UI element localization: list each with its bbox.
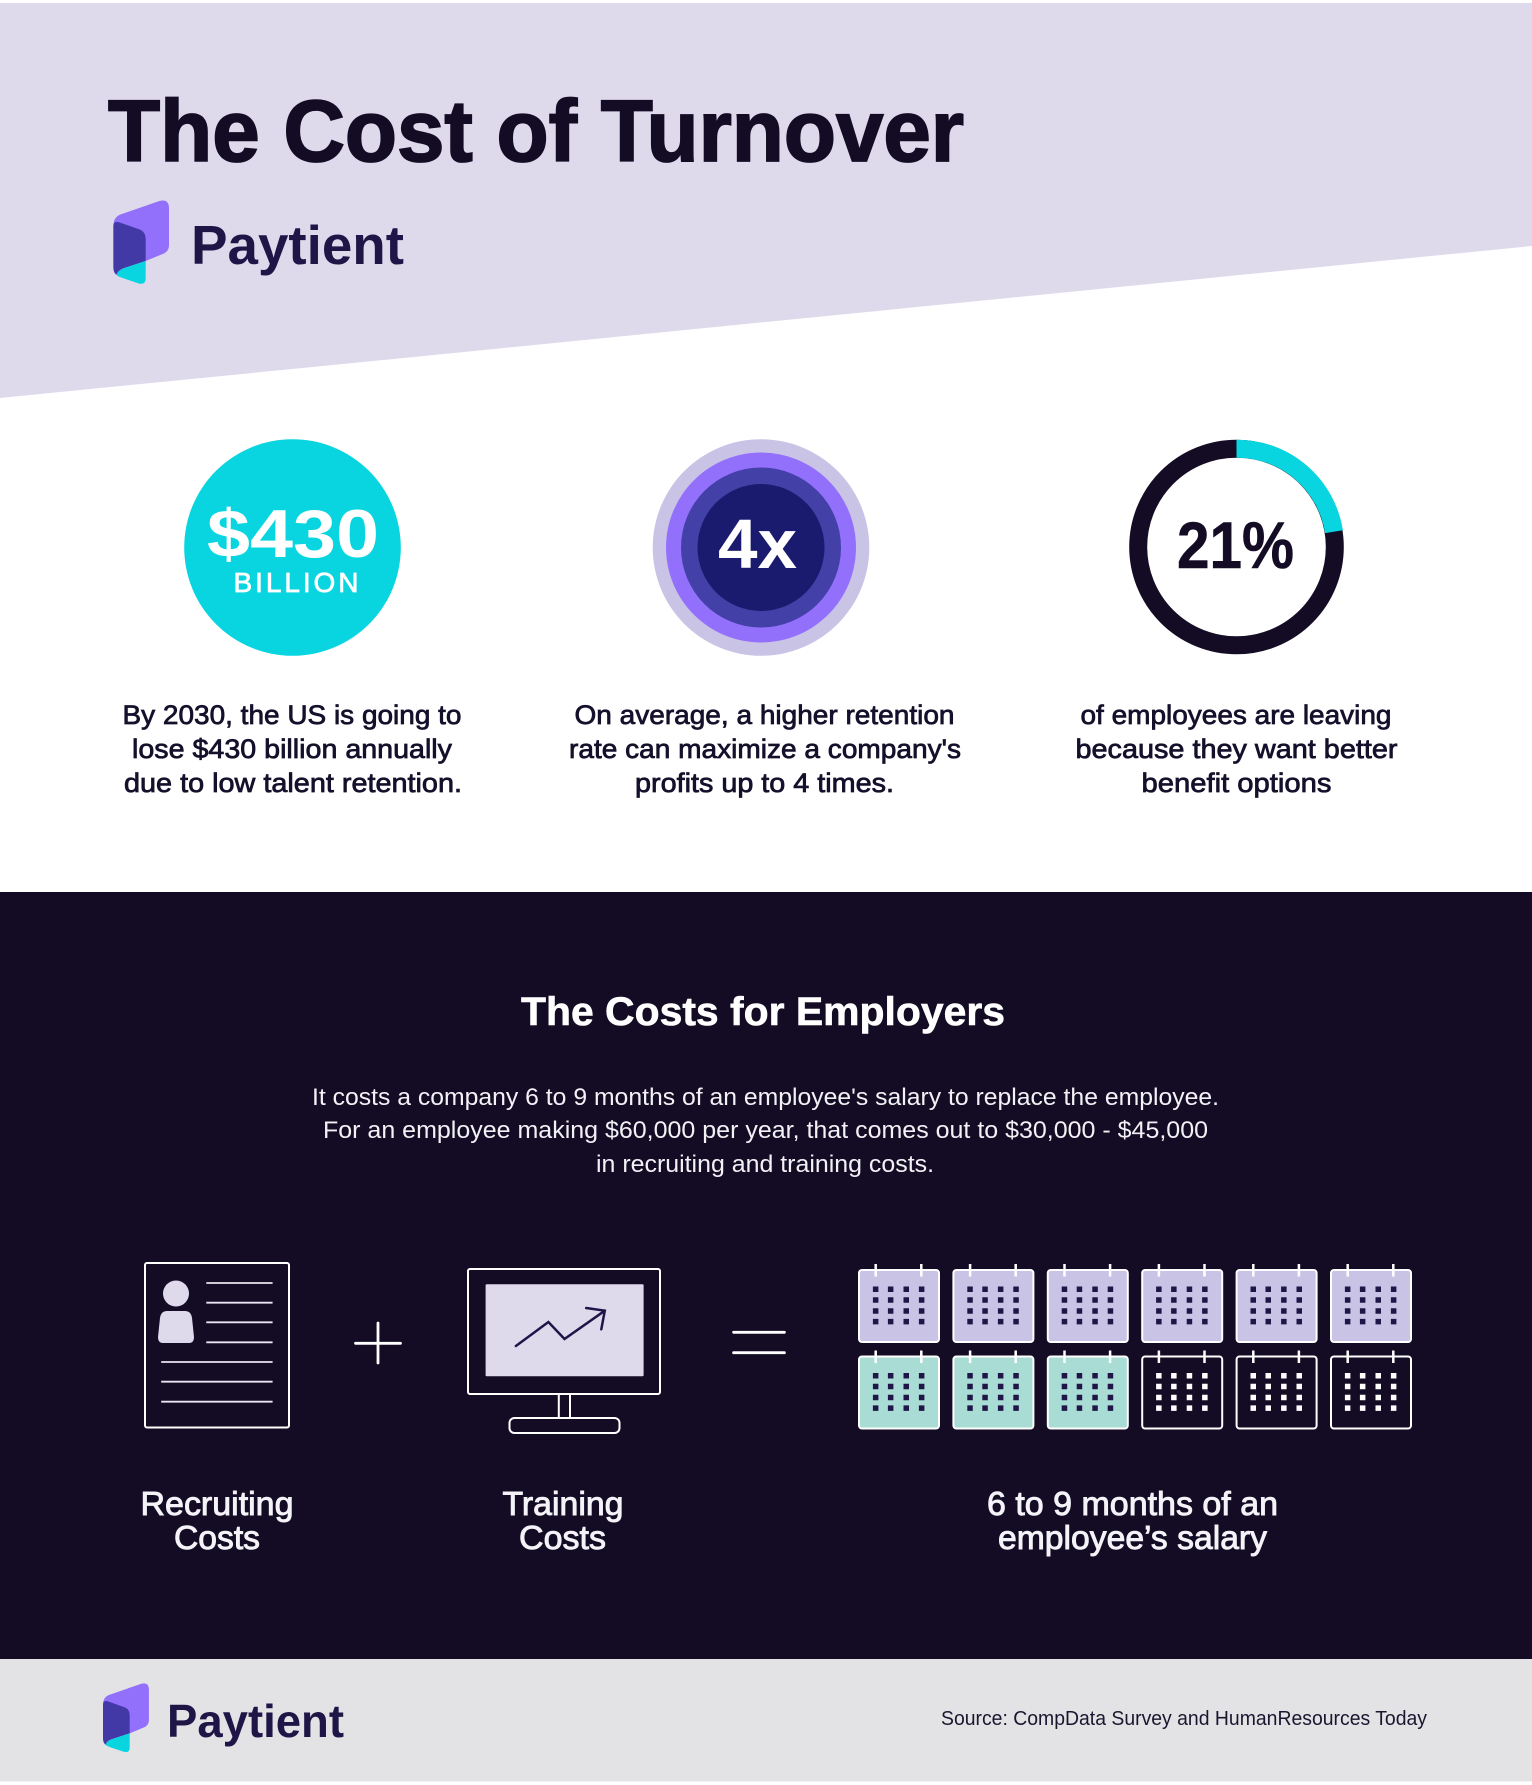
stat description: of employees are leaving: [1080, 700, 1392, 730]
stat description: benefit options: [1142, 768, 1332, 798]
header logo: Paytient: [113, 200, 404, 284]
logo wordmark: Paytient: [167, 1695, 344, 1747]
donut chart: [1138, 449, 1335, 645]
label: recruiting costs: Recruiting: [140, 1485, 294, 1522]
label: recruiting costs: [140, 1485, 294, 1556]
stat description: On average, a higher retention: [574, 700, 954, 730]
calendars: six lavender months: [859, 1264, 1411, 1342]
icon: resume document: [145, 1263, 289, 1428]
dark panel: costs for employers: [0, 892, 1532, 1659]
stat description: By 2030, the US is going to: [122, 700, 462, 730]
stat description: profits up to 4 times.: [635, 768, 894, 798]
stat unit: BILLION: [234, 567, 358, 598]
stat description: [569, 700, 961, 798]
label: recruiting costs: Costs: [174, 1519, 260, 1556]
stat panel: 21%: [1076, 449, 1398, 798]
label: training costs: Training: [502, 1485, 624, 1522]
source note: Source: CompData Survey and HumanResources Today: [941, 1707, 1428, 1730]
label: training costs: Costs: [519, 1519, 606, 1556]
label: months of salary: 6 to 9 months of an: [987, 1485, 1278, 1522]
section body text: It costs a company 6 to 9 months of an employee's salary to replace the employee.: [312, 1084, 1219, 1111]
concentric circles: [653, 439, 869, 656]
stat value: $430: [207, 496, 379, 572]
stat value: 4x: [718, 505, 797, 583]
stat description: rate can maximize a company's: [569, 734, 961, 764]
stat panel: $430 billion: [122, 439, 462, 798]
stat description: lose $430 billion annually: [132, 734, 453, 764]
section heading: The Costs for Employers: [521, 990, 1005, 1034]
icon: Paytient mark: [103, 1683, 149, 1752]
header panel: [0, 3, 1532, 398]
icon: plus sign: [356, 1323, 400, 1363]
icon: Paytient mark: [113, 200, 169, 284]
stat description: because they want better: [1076, 734, 1398, 764]
footer logo: Paytient: [103, 1683, 344, 1752]
label: months of salary: [987, 1485, 1278, 1556]
calendars: three outline months: [1142, 1350, 1411, 1428]
section body text: [312, 1084, 1219, 1178]
calendar grid: 6 to 9 months: [859, 1264, 1411, 1428]
footer panel: [0, 1659, 1532, 1782]
icon: monitor with rising chart: [468, 1269, 660, 1433]
stat panel: 4x: [569, 439, 961, 798]
stat description: [1076, 700, 1398, 798]
label: training costs: [502, 1485, 624, 1556]
label: months of salary: employee’s salary: [998, 1519, 1267, 1556]
logo wordmark: Paytient: [191, 214, 404, 276]
section body text: in recruiting and training costs.: [596, 1151, 934, 1178]
calendars: three teal months: [859, 1350, 1128, 1428]
stat description: due to low talent retention.: [124, 768, 462, 798]
section body text: For an employee making $60,000 per year, that comes out to $30,000 - $45,000: [323, 1117, 1208, 1144]
stat circle: [184, 439, 401, 656]
icon: equals sign: [734, 1332, 784, 1353]
stat value: 21%: [1177, 508, 1294, 582]
stat description: [122, 700, 462, 798]
title: The Cost of Turnover: [108, 83, 964, 180]
